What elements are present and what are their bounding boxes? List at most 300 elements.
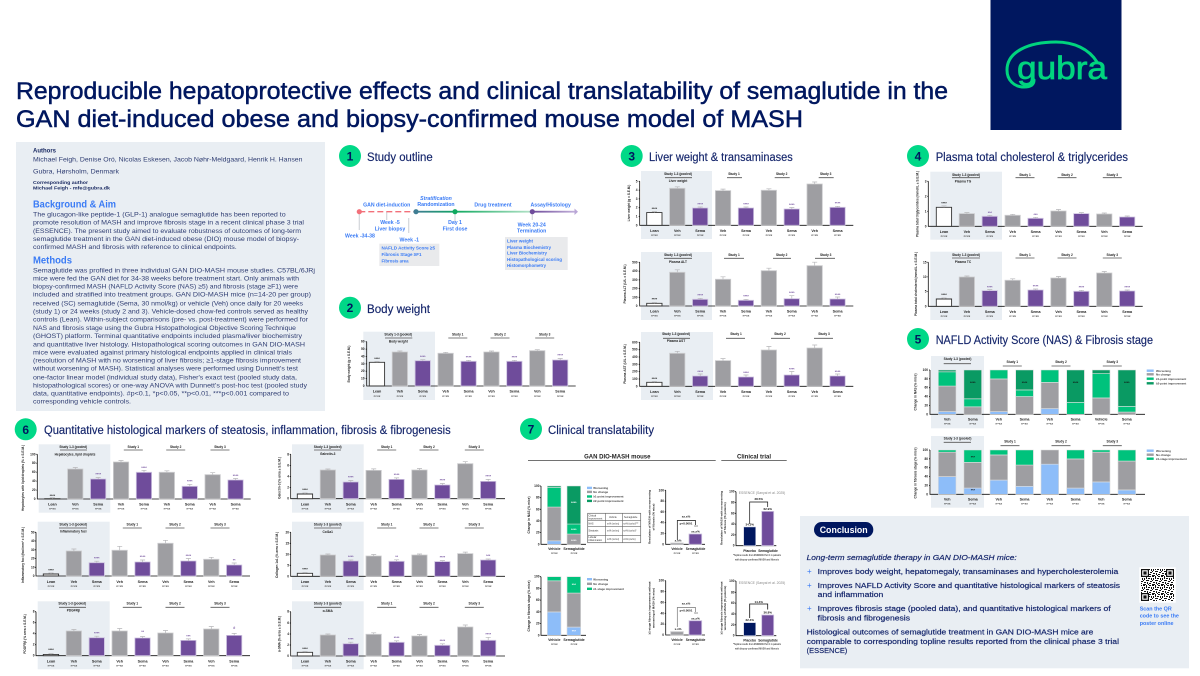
bar chart: ESSENCE fibrosis improvement: 20: [731, 623, 735, 627]
bar chart: mouse fibrosis improvement: [648, 579, 705, 646]
bar chart: mouse MASH resolution: x.x%: [675, 538, 682, 542]
table: responder rates: xx% (xx/xx)*: [623, 530, 637, 532]
bar chart: alpha-SMA: n=xx: [439, 664, 446, 668]
bar chart: body weight: ****: [466, 356, 472, 360]
stacked bar chart: change in NAS: 0: [926, 412, 928, 416]
bar chart: body weight: Sema: [418, 390, 429, 394]
bar chart: collagen 1a1: Sema: [392, 580, 402, 584]
bar chart: plasma triglycerides: Study 2: [1061, 173, 1073, 177]
bar chart: alpha-SMA: ****: [302, 647, 308, 651]
stacked bar chart: mouse NAS: Vehicle: [548, 547, 560, 551]
table: responder rates: improvement: [588, 518, 603, 520]
bar chart: liver weight: ****: [835, 202, 841, 206]
bar chart: galectin-3: Study 1-3 (pooled): [314, 445, 342, 449]
bar chart: plasma triglycerides: Plasma total triglycerides (mmol/L ± S.E.M.): [916, 171, 920, 237]
bar chart: hepatocytes with lipid droplets: Veh: [209, 503, 217, 507]
bar chart: mouse fibrosis improvement: 20: [660, 622, 664, 626]
bar chart: plasma triglycerides: ****: [941, 202, 947, 206]
stacked bar chart: change in fibrosis stage: 80: [924, 457, 928, 461]
bar chart: plasma ALT: Sema: [833, 310, 843, 314]
QR caption: Scan the QR: [1140, 606, 1172, 612]
bar chart: hepatocytes with lipid droplets: Veh: [72, 503, 79, 507]
conclusion text: Improves NAFLD Activity Score and quantitative histological markers of steatosis: [818, 581, 1120, 590]
bar chart: plasma total cholesterol: ****: [941, 293, 947, 297]
bar chart: PDGFR-beta: Veh: [162, 660, 170, 664]
timeline: Week -5: [380, 220, 400, 226]
bar chart: plasma triglycerides: n=xx: [1078, 234, 1085, 238]
bar chart: hepatocytes with lipid droplets: n=xx: [72, 507, 79, 511]
bar chart: collagen 1a1: Lean: [301, 580, 310, 584]
box: inclusion criteria: Fibrosis Stage ≥F1: [382, 252, 422, 258]
stacked bar chart: change in NAS: Sema: [1122, 418, 1133, 422]
authors: Michael Feigh - mfe@gubra.dk: [33, 186, 111, 191]
bar chart: galectin-3: n=xx: [393, 507, 400, 511]
stacked bar chart: change in fibrosis stage: Study 1: [1004, 440, 1016, 444]
bar chart: mouse MASH resolution: 100: [659, 488, 664, 492]
bar chart: plasma ALT: 100: [632, 295, 638, 299]
bar chart: alpha-SMA: 8: [287, 610, 289, 614]
bar chart: body weight: n=xx: [419, 394, 427, 398]
bar chart: collagen 1a1: 20: [285, 530, 289, 534]
bar chart: PDGFR-beta: Sema: [183, 660, 194, 664]
column headers: mouse and clinical trial: GAN DIO-MASH mouse: [584, 455, 651, 461]
bar chart: plasma AST: ****: [697, 370, 704, 374]
bar chart: mouse fibrosis improvement: Semaglutide: [686, 638, 705, 642]
heading: liver weight and transaminases: [621, 145, 793, 167]
bar chart: galectin-3: Sema: [392, 503, 402, 507]
bar chart: plasma total cholesterol: 10: [923, 275, 927, 279]
table: responder rates: xx% (xx/xx): [623, 538, 636, 541]
bar chart: alpha-SMA: Sema: [483, 660, 494, 664]
bar chart: galectin-3: ****: [440, 478, 446, 482]
legend: NAS: ≥1-point improvement: [1156, 377, 1186, 381]
bar chart: plasma total cholesterol: Veh: [964, 310, 971, 314]
bar chart: ESSENCE fibrosis improvement: 14.4%: [754, 600, 763, 604]
bar chart: hepatocytes with lipid droplets: n=xx: [232, 507, 239, 511]
column headers: mouse and clinical trial: [528, 455, 787, 461]
bar chart: inflammatory foci: n=xx: [71, 584, 78, 588]
stacked bar chart: change in NAS: Change in NAS (% mice): [914, 373, 918, 411]
background and aim: The glucagon-like peptide-1 (GLP-1) analogue semaglutide has been reported to: [33, 212, 286, 219]
bar chart: liver weight: Veh: [811, 229, 819, 233]
bar chart: collagen 1a1: n=xx: [302, 584, 309, 588]
bar chart: plasma AST: 600: [632, 340, 638, 344]
stacked bar chart: mouse fibrosis stage: Vehicle: [548, 638, 560, 642]
methods: histopathological scores) or one-way ANOVA with Dunnett's post-hoc test (pooled study: [33, 383, 308, 390]
bar chart: hepatocytes with lipid droplets: 40: [32, 479, 36, 483]
stacked bar chart: mouse fibrosis stage: n=xx: [551, 642, 558, 646]
bar chart: alpha-SMA: ****: [348, 638, 354, 642]
panel: authors, background and methods: [16, 142, 325, 411]
stacked bar chart: change in NAS: Veh: [996, 418, 1003, 422]
table: responder rates: Steatosis: [588, 530, 599, 532]
bar chart: plasma total cholesterol: Study 1-3 (pooled): [952, 253, 980, 257]
bar chart: hepatocytes with lipid droplets: Sema: [231, 503, 241, 507]
bar chart: ESSENCE fibrosis improvement: worsening of MASH (% patients): [723, 586, 727, 631]
legend: mouse NAS: No change: [593, 490, 608, 494]
column headers: mouse and clinical trial: Clinical trial: [737, 455, 771, 461]
stacked bar chart: change in NAS: n=xx: [1072, 422, 1079, 426]
bar chart: collagen 1a1: n=xx: [416, 584, 423, 588]
conclusion pill: [814, 522, 873, 537]
stacked bar chart: change in NAS: ****: [1124, 381, 1130, 385]
panel: conclusion: [800, 516, 1189, 668]
title: GAN diet-induced obese and biopsy-confirmed mouse model of MASH: [16, 106, 803, 133]
bar chart: alpha-SMA: n=xx: [416, 664, 423, 668]
bar chart: plasma total cholesterol: n=xx: [1055, 314, 1062, 318]
stacked bar chart: mouse fibrosis stage: ***: [572, 583, 576, 587]
bar chart: plasma total cholesterol: n=xx: [1124, 314, 1131, 318]
bar chart: plasma AST: n=xx: [697, 394, 704, 398]
bar chart: ESSENCE MASH resolution: 0: [733, 544, 735, 548]
bar chart: body weight: Body weight: [389, 340, 409, 344]
stacked bar chart: change in fibrosis stage: 0: [926, 492, 928, 496]
bar chart: plasma AST: Sema: [787, 390, 798, 394]
timeline: [345, 196, 578, 244]
bar chart: galectin-3: Galectin-3: [320, 452, 336, 456]
bar chart: plasma AST: 0: [636, 384, 638, 388]
bar chart: PDGFR-beta: n=xx: [48, 664, 55, 668]
bar chart: liver weight: n=xx: [674, 233, 681, 237]
bar chart: plasma triglycerides: n=xx: [986, 234, 994, 238]
bar chart: plasma AST: Sema: [833, 390, 843, 394]
bar chart: plasma ALT: Study 3: [820, 253, 832, 257]
bar chart: liver weight: 5: [636, 179, 638, 183]
bar chart: galectin-3: 4: [287, 474, 289, 478]
bar chart: plasma total cholesterol: ****: [987, 286, 993, 290]
bar chart: plasma triglycerides: [916, 171, 1143, 240]
box: terminal endpoints: Histopathological scoring: [507, 257, 562, 263]
stacked bar chart: change in fibrosis stage: n=xx: [1072, 502, 1079, 506]
bar chart: ESSENCE MASH resolution: 40: [731, 522, 735, 526]
bar chart: plasma triglycerides: n=xx: [1032, 234, 1039, 238]
bar chart: plasma AST: n=xx: [720, 394, 727, 398]
bar chart: liver weight: 2: [636, 206, 638, 210]
stacked bar chart: mouse NAS: n=xx: [551, 551, 558, 555]
stacked bar chart: change in fibrosis stage: Veh: [996, 498, 1003, 502]
bar chart: plasma triglycerides: Veh: [1009, 230, 1017, 234]
bar chart: mouse MASH resolution: xx.x%: [691, 530, 700, 534]
stacked bar chart: change in NAS: ****: [1073, 381, 1079, 385]
QR caption: poster online: [1140, 621, 1174, 627]
bar chart: alpha-SMA: Veh: [325, 660, 332, 664]
bar chart: body weight: ****: [512, 356, 518, 360]
stacked bar chart: change in fibrosis stage: n=xx: [995, 502, 1003, 506]
methods: without worsening of MASH). Statistical analyses were performed using Dunnett's test: [32, 366, 298, 373]
bar chart: hepatocytes with lipid droplets: ****: [95, 472, 102, 476]
bar chart: liver weight: Study 1: [728, 172, 740, 176]
stacked bar chart: change in NAS: Study 2: [1055, 360, 1067, 364]
bar chart: body weight: n=xx: [557, 394, 564, 398]
bar chart: inflammatory foci: n=xx: [48, 584, 55, 588]
bar chart: hepatocytes with lipid droplets: Hepatocytes, lipid droplets: [55, 452, 96, 456]
stacked bar chart: change in NAS: Sema: [968, 418, 979, 422]
bar chart: body weight: Veh: [534, 390, 541, 394]
bar chart: ESSENCE fibrosis improvement: 22.4%: [745, 618, 754, 622]
bar chart: plasma AST: ****: [743, 371, 749, 375]
bar chart: plasma triglycerides: ***: [988, 211, 992, 215]
conclusion text: fibrosis and fibrogenesis: [818, 614, 910, 623]
stacked bar chart: change in fibrosis stage: Sema: [1071, 498, 1081, 502]
bar chart: alpha-SMA: n=xx: [462, 664, 469, 668]
bar chart: plasma triglycerides: Sema: [1122, 230, 1133, 234]
bar chart: plasma ALT: ****: [789, 291, 795, 295]
bar chart: mouse fibrosis improvement: Vehicle: [671, 638, 683, 642]
methods: and quantitative liver histology. Histopathological scoring outcomes in GAN DIO-MASH: [33, 342, 305, 349]
stacked bar chart: change in fibrosis stage: Sema: [1020, 498, 1030, 502]
bar chart: inflammatory foci: Study 2: [169, 523, 181, 527]
bar chart: mouse MASH resolution: n=xx: [692, 551, 699, 555]
bar chart: ESSENCE MASH resolution: 80: [731, 500, 735, 504]
bar chart: hepatocytes with lipid droplets: ****: [141, 466, 147, 470]
bar chart: hepatocytes with lipid droplets: Sema: [93, 503, 104, 507]
bar chart: ESSENCE fibrosis improvement: 36.8%: [763, 610, 772, 614]
bar chart: mouse fibrosis improvement: 100: [659, 579, 664, 583]
conclusion text: [807, 553, 1120, 655]
bar chart: alpha-SMA: n=xx: [302, 664, 309, 668]
panel: study outline: [339, 145, 578, 270]
bar chart: plasma total cholesterol: Plasma total cholesterol (mmol/L ± S.E.M.): [914, 252, 918, 316]
stacked bar chart: change in fibrosis stage: ***: [971, 456, 975, 460]
bar chart: mouse MASH resolution: ***: [694, 524, 699, 528]
bar chart: ESSENCE fibrosis improvement: *Topline results from ESSENCE Part 1 in patients: [733, 642, 781, 646]
bar chart: alpha-SMA: α-SMA: [323, 609, 333, 613]
stacked bar chart: change in NAS: n=xx: [1046, 422, 1054, 426]
bar chart: inflammatory foci: n=xx: [93, 584, 101, 588]
stacked bar chart: change in fibrosis stage: n=xx: [1021, 502, 1028, 506]
conclusion text: Improves fibrosis stage (pooled data), and quantitative histological markers of: [818, 604, 1112, 613]
bar chart: PDGFR-beta: Study 1: [127, 602, 138, 606]
heading: NAS and fibrosis stage: 5: [915, 332, 922, 346]
stacked bar chart: change in NAS: n=xx: [1123, 422, 1131, 426]
legend: mouse fibrosis stage: [587, 577, 624, 591]
bar chart: inflammatory foci: Study 1-3 (pooled): [59, 523, 87, 527]
bar chart: ESSENCE fibrosis improvement: Placebo: [743, 638, 756, 642]
bar chart: hepatocytes with lipid droplets: 80: [32, 461, 36, 465]
bar chart: body weight: Sema: [555, 390, 566, 394]
authors: [33, 148, 303, 191]
timeline: Randomization: [417, 202, 455, 208]
bar chart: plasma total cholesterol: n=xx: [941, 314, 948, 318]
bar chart: liver weight: ****: [697, 202, 704, 206]
bar chart: liver weight: Sema: [833, 229, 843, 233]
bar chart: liver weight: n=xx: [834, 233, 841, 237]
bar chart: liver weight: Liver weight (g ± S.E.M.): [627, 185, 631, 221]
bar chart: PDGFR-beta: ***: [186, 634, 191, 638]
bar chart: plasma ALT: Sema: [695, 310, 706, 314]
bar chart: mouse fibrosis improvement: n=xx: [692, 642, 699, 646]
bar chart: plasma triglycerides: Plasma TG: [955, 179, 972, 183]
stacked bar chart: change in fibrosis stage: n=xx: [944, 502, 951, 506]
bar chart: inflammatory foci: 20: [31, 556, 35, 560]
bar chart: plasma ALT: 0: [636, 304, 638, 308]
bar chart: liver weight: Study 1-3 (pooled): [664, 172, 692, 176]
stacked bar chart: mouse NAS: n=xx: [571, 551, 578, 555]
bar chart: inflammatory foci: Study 1: [127, 523, 138, 527]
conclusion text: comparable to corresponding topline results reported from the clinical phase 3 trial: [807, 637, 1119, 646]
bar chart: body weight: 0: [363, 384, 365, 388]
bar chart: hepatocytes with lipid droplets: ****: [233, 474, 239, 478]
bar chart: plasma total cholesterol: Veh: [1009, 310, 1017, 314]
stacked bar chart: mouse NAS: ****: [571, 501, 577, 505]
bar chart: plasma ALT: Plasma ALT: [669, 260, 687, 264]
bar chart: liver weight: Sema: [695, 229, 706, 233]
bar chart: plasma ALT: 500: [632, 260, 638, 264]
bar chart: mouse MASH resolution: 40: [660, 521, 664, 525]
timeline: Termination: [517, 229, 546, 235]
bar chart: hepatocytes with lipid droplets: Hepatocytes with lipid droplets (% ± S.E.M.): [21, 445, 25, 511]
bar chart: plasma AST: n=xx: [788, 394, 796, 398]
bar chart: inflammatory foci: ****: [94, 556, 100, 560]
bar chart: plasma triglycerides: Sema: [1076, 230, 1087, 234]
heading: liver weight and transaminases: 3: [628, 150, 635, 164]
panel: liver weight and transaminases: [621, 145, 853, 400]
stacked bar chart: mouse NAS: 40: [536, 519, 540, 523]
bar chart: plasma ALT: Plasma ALT (U/L ± S.E.M.): [623, 264, 627, 304]
bar chart: plasma AST: n=xx: [743, 394, 750, 398]
bar chart: galectin-3: ****: [394, 473, 400, 477]
bar chart: collagen 1a1: Study 3: [469, 523, 480, 527]
stacked bar chart: change in fibrosis stage: Veh: [1098, 498, 1105, 502]
bar chart: PDGFR-beta: **: [141, 630, 145, 634]
bar chart: ESSENCE MASH resolution: Resolution of MASH with no worsening: [719, 491, 723, 545]
bar chart: galectin-3: Veh: [325, 503, 332, 507]
bar chart: plasma triglycerides: n=xx: [1124, 234, 1131, 238]
legend: fibrosis stage: Worsening: [1156, 449, 1171, 453]
methods: controls (Lean). Within-subject comparisons (pre- vs. post-treatment) were performed for: [33, 316, 309, 323]
bar chart: plasma triglycerides: ***: [1033, 213, 1038, 217]
bar chart: body weight: Body weight (g ± S.E.M.): [347, 346, 351, 382]
bar chart: PDGFR-beta: n=xx: [162, 664, 169, 668]
bar chart: plasma triglycerides: Veh: [1055, 230, 1063, 234]
methods: (GHOST) platform. Terminal quantitative endpoints included plasma/liver biochemistry: [33, 333, 303, 340]
stacked bar chart: mouse fibrosis stage: Change in fibrosis stage (% mice): [527, 580, 531, 632]
bar chart: alpha-SMA: Study 1: [381, 602, 393, 606]
bar chart: mouse fibrosis improvement: ≥1-stage fibrosis improvement without: [648, 581, 652, 634]
bar chart: alpha-SMA: Sema: [392, 660, 402, 664]
bar chart: plasma triglycerides: Study 1-3 (pooled): [952, 173, 980, 177]
title: [16, 78, 948, 133]
bar chart: alpha-SMA: Lean: [301, 660, 310, 664]
bar chart: plasma AST: Veh: [766, 390, 773, 394]
bar chart: mouse MASH resolution: 60: [660, 510, 664, 514]
conclusion text: +: [807, 604, 812, 613]
bar chart: plasma AST: 500: [632, 348, 638, 352]
bar chart: liver weight: Veh: [720, 229, 727, 233]
bar chart: galectin-3: Lean: [301, 503, 310, 507]
bar chart: hepatocytes with lipid droplets: Veh: [164, 503, 171, 507]
stacked bar chart: change in fibrosis stage: 40: [924, 474, 928, 478]
bar chart: mouse MASH resolution: 20: [660, 532, 664, 536]
bar chart: mouse MASH resolution: 0: [662, 542, 664, 546]
bar chart: inflammatory foci: n=xx: [231, 584, 238, 588]
bar chart: plasma ALT: [623, 252, 853, 320]
bar chart: ESSENCE MASH resolution: *Topline results from ESSENCE Part 1 in patients: [733, 553, 781, 557]
bar chart: plasma ALT: n=xx: [651, 314, 658, 318]
bar chart: inflammatory foci: Study 3: [214, 523, 226, 527]
bar chart: alpha-SMA: n=xx: [347, 664, 355, 668]
table: responder rates: [588, 513, 641, 543]
bar chart: alpha-SMA: n=xx: [370, 664, 377, 668]
box: inclusion criteria: [379, 244, 439, 266]
box: terminal endpoints: Liver weight: [507, 239, 533, 245]
bar chart: plasma total cholesterol: Lean: [940, 310, 949, 314]
bar chart: hepatocytes with lipid droplets: Sema: [139, 503, 150, 507]
bar chart: plasma ALT: Study 1-3 (pooled): [664, 253, 692, 257]
table: responder rates: xx% (xx/xx): [607, 530, 619, 532]
bar chart: PDGFR-beta: Sema: [138, 660, 148, 664]
bar chart: collagen 1a1: Veh: [325, 580, 332, 584]
stacked bar chart: mouse fibrosis stage: 0: [538, 633, 540, 637]
bar chart: plasma ALT: n=xx: [788, 314, 796, 318]
stacked bar chart: change in NAS: [914, 356, 1186, 428]
stacked bar chart: change in NAS: ****: [970, 381, 976, 385]
bar chart: hepatocytes with lipid droplets: Study 1: [128, 445, 139, 449]
bar chart: PDGFR-beta: Veh: [116, 660, 124, 664]
stacked bar chart: mouse fibrosis stage: 60: [536, 598, 540, 602]
bar chart: collagen 1a1: [275, 522, 505, 590]
bar chart: alpha-SMA: ****: [440, 639, 446, 643]
box: terminal endpoints: Plasma Biochemistry: [507, 245, 551, 251]
bar chart: ESSENCE fibrosis improvement: 80: [731, 590, 735, 594]
bar chart: galectin-3: Study 3: [469, 445, 480, 449]
bar chart: liver weight: Study 3: [820, 172, 832, 176]
bar chart: liver weight: 3: [636, 197, 638, 201]
bar chart: PDGFR-beta: Veh: [208, 660, 215, 664]
bar chart: plasma total cholesterol: ****: [1033, 284, 1039, 288]
bar chart: body weight: 20: [361, 369, 365, 373]
bar chart: PDGFR-beta: Sema: [92, 660, 103, 664]
methods: mice were evaluated against primary histological endpoints applied in clinical trials: [33, 350, 292, 357]
bar chart: liver weight: ****: [789, 203, 795, 207]
bar chart: plasma AST: n=xx: [674, 394, 681, 398]
bar chart: galectin-3: n=xx: [485, 507, 492, 511]
bar chart: body weight: Sema: [509, 390, 520, 394]
bar chart: plasma ALT: Veh: [811, 310, 819, 314]
methods: corresponding vehicle controls.: [33, 399, 131, 406]
stacked bar chart: mouse NAS: 0: [538, 542, 540, 546]
QR caption: code to see the: [1140, 614, 1179, 620]
bar chart: body weight: ****: [420, 355, 426, 359]
bar chart: body weight: n=xx: [442, 394, 449, 398]
legend: NAS: [1147, 369, 1186, 385]
bar chart: galectin-3: n=xx: [302, 507, 309, 511]
bar chart: mouse fibrosis improvement: 0: [662, 633, 664, 637]
bar chart: PDGFR-beta: Study 2: [169, 602, 181, 606]
bar chart: body weight: [347, 332, 576, 400]
bar chart: plasma ALT: 400: [632, 269, 638, 273]
bar chart: collagen 1a1: 0: [287, 574, 289, 578]
bar chart: body weight: n=xx: [511, 394, 518, 398]
bar chart: plasma ALT: ****: [652, 298, 658, 302]
bar chart: body weight: n=xx: [534, 394, 541, 398]
bar chart: plasma total cholesterol: n=xx: [1101, 314, 1108, 318]
stacked bar chart: change in NAS: 100: [923, 368, 928, 372]
bar chart: hepatocytes with lipid droplets: n=xx: [209, 507, 216, 511]
table: responder rates: xx% (xx/xx)***: [623, 523, 638, 526]
table: responder rates: Semaglutide: [624, 516, 638, 519]
bar chart: plasma AST: 400: [632, 355, 638, 359]
bar chart: PDGFR-beta: n=xx: [116, 664, 123, 668]
stacked bar chart: change in fibrosis stage: 100: [923, 448, 928, 452]
stacked bar chart: mouse fibrosis stage: 40: [536, 610, 540, 614]
bar chart: mouse MASH resolution: xx.x%: [682, 514, 691, 518]
table: responder rates: inflammation: [588, 539, 603, 542]
bar chart: galectin-3: 2: [287, 486, 289, 490]
bar chart: liver weight: n=xx: [788, 233, 796, 237]
bar chart: PDGFR-beta: 4: [33, 632, 35, 636]
bar chart: inflammatory foci: n=xx: [139, 584, 146, 588]
